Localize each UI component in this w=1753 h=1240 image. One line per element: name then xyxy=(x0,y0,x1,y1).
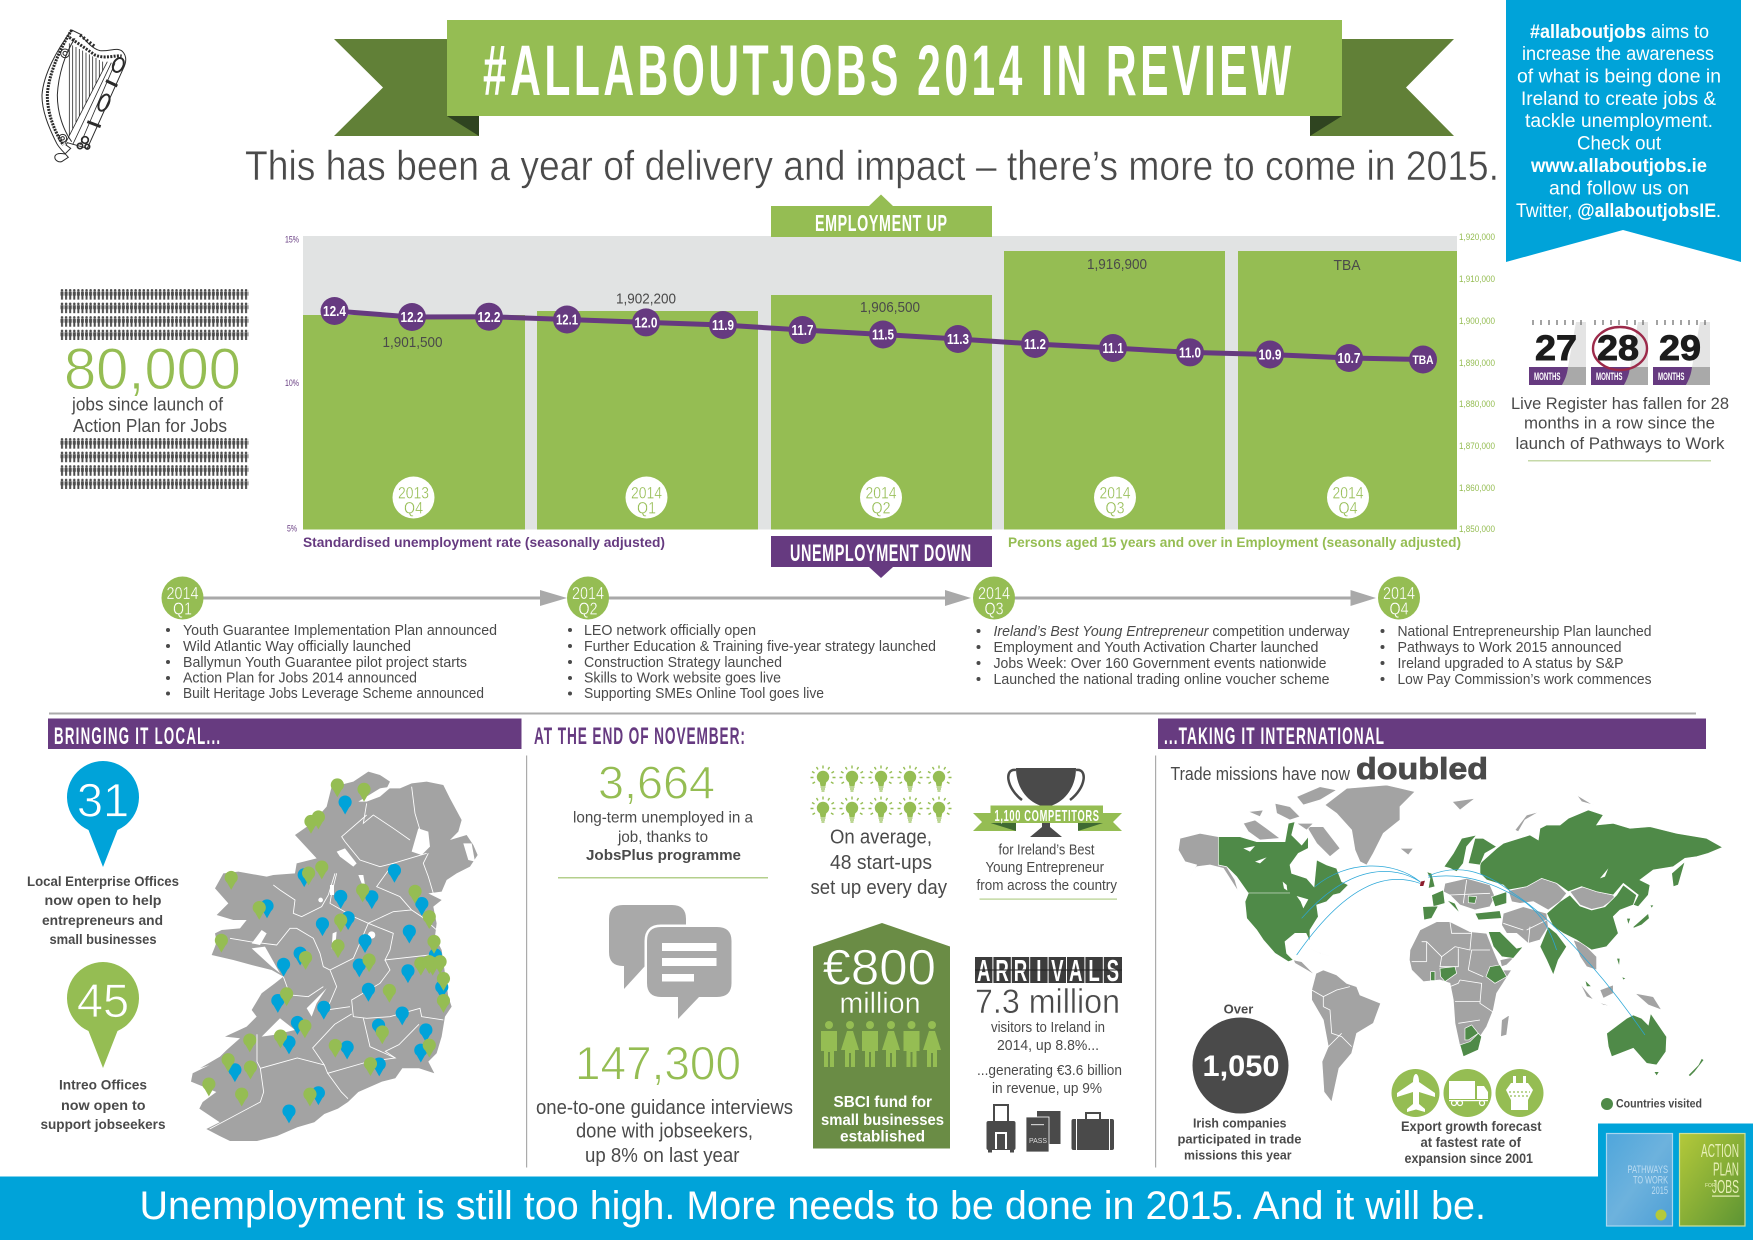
heading: taking it international: ...TAKING IT INTERNATIONAL xyxy=(1164,723,1384,750)
icon: speech bubbles xyxy=(609,905,732,1019)
callout: about the campaign: Ireland to create jobs & xyxy=(1521,89,1716,110)
stat: 3,664 long-term unemployed xyxy=(558,756,768,878)
panel: SBCI fund xyxy=(813,923,950,1148)
chart captions: Persons aged 15 years and over in Employment (seasonally adjusted) xyxy=(1008,534,1461,550)
stat: 147,300 interviews: done with jobseekers, xyxy=(576,1120,753,1142)
calendar 28 xyxy=(1591,320,1648,385)
callout: about the campaign: #allaboutjobs aims to xyxy=(1530,22,1709,43)
timeline: 2014 Q3: 2014 xyxy=(978,583,1010,603)
text: local enterprise offices: Local Enterprise Offices xyxy=(27,873,179,889)
text: local enterprise offices: small businesses xyxy=(50,931,157,947)
icon: luggage xyxy=(986,1105,1114,1152)
stat: 147,300 interviews: 147,300 xyxy=(575,1036,741,1090)
map: world with countries visited xyxy=(1178,785,1723,1102)
text: local enterprise offices: now open to help xyxy=(44,892,162,908)
stat: 80,000 jobs: 80,000 xyxy=(64,337,241,402)
pin: 31 local enterprise offices: 31 xyxy=(77,774,129,826)
chart: unemployment rate and employment xyxy=(285,232,1495,550)
stat: 147,300 interviews: one-to-one guidance interviews xyxy=(536,1097,793,1119)
callout: about the campaign: Check out xyxy=(1577,134,1662,154)
text: local enterprise offices xyxy=(27,873,179,947)
panel: at the end of November xyxy=(534,723,1122,1167)
timeline: 2014 Q1: Ballymun Youth Guarantee pilot project starts xyxy=(183,655,467,671)
timeline: 2014 Q2: 2014 xyxy=(572,583,604,603)
icon: trophy with ribbon: 1,100 COMPETITORS xyxy=(994,806,1099,825)
callout: about the campaign: Twitter, @allaboutjobsIE. xyxy=(1516,201,1721,222)
timeline: 2014 Q1: Youth Guarantee Implementation Plan announced xyxy=(183,623,497,639)
stat: 147,300 interviews: up 8% on last year xyxy=(585,1145,740,1167)
stat: 7.3 million visitors: ...generating €3.6 billion xyxy=(977,1062,1122,1079)
left axis: 15% xyxy=(285,234,299,244)
stat: 7.3 million visitors: visitors to Ireland in xyxy=(991,1019,1105,1036)
bar: 2014 Q4 xyxy=(1238,251,1457,530)
text: intreo offices: support jobseekers xyxy=(40,1116,166,1132)
timeline: 2014 Q2: Skills to Work website goes live xyxy=(584,670,781,686)
right axis: 1,900,000 xyxy=(1459,316,1495,326)
left axis: 10% xyxy=(285,378,299,388)
calendar 27: 27 xyxy=(1535,329,1577,368)
bar: 2014 Q1: Q1 xyxy=(637,498,656,518)
unemployment line: 12.2 xyxy=(400,309,424,326)
text: young entrepreneur competitors: from across the country xyxy=(976,878,1118,894)
stat: 1,050 Irish companies: Irish companies xyxy=(1193,1116,1286,1130)
timeline: 2014 Q4: Ireland upgraded to A status by S&P xyxy=(1398,656,1624,672)
text: export growth forecast: at fastest rate of xyxy=(1420,1135,1521,1150)
stat: 3,664 long-term unemployed: JobsPlus programme xyxy=(586,847,741,864)
stat: 80,000 jobs: Action Plan for Jobs xyxy=(73,416,227,436)
icon: arrivals board: ARRIVALS xyxy=(977,954,1119,988)
title banner: #ALLABOUTJOBS 2014 IN REVIEW xyxy=(483,32,1292,111)
text: trade missions doubled: doubled xyxy=(1356,751,1488,786)
subtitle: This has been a year of delivery and impact – there’s more to come in 2015. xyxy=(245,142,1499,189)
icon: truck xyxy=(1444,1069,1492,1117)
panel: SBCI fund: €800 xyxy=(822,940,936,996)
bar: 2014 Q1 xyxy=(537,311,758,530)
stat: live register calendars: launch of Pathways to Work xyxy=(1516,434,1725,453)
footer banner: Unemployment is still too high. More needs to be done in 2015. And it will be. xyxy=(140,1184,1486,1228)
report cover: Action Plan for Jobs: FOR xyxy=(1705,1183,1716,1189)
stat: 48 start-ups: On average, xyxy=(830,826,932,848)
label: employment up xyxy=(771,194,992,237)
bar: 2014 Q2: Q2 xyxy=(872,498,890,518)
calendar 29: MONTHS xyxy=(1658,371,1684,383)
unemployment line: 12.4 xyxy=(323,303,347,320)
text: trade missions doubled xyxy=(1170,751,1488,786)
timeline: 2014 Q3: Launched the national trading online voucher scheme xyxy=(994,672,1330,688)
timeline: 2014 Q4: Q4 xyxy=(1390,598,1409,618)
unemployment line: 11.9 xyxy=(712,317,734,334)
stat: 7.3 million visitors: 7.3 million xyxy=(975,983,1120,1021)
timeline: 2014 Q3: Q3 xyxy=(984,598,1004,618)
icon: luggage: PASS xyxy=(1029,1136,1047,1145)
timeline: 2014 Q4: National Entrepreneurship Plan launched xyxy=(1398,624,1652,640)
Eastern hemisphere xyxy=(1409,795,1723,1077)
right axis: 1,860,000 xyxy=(1459,483,1495,493)
stat: 1,050 Irish companies: Over xyxy=(1224,1002,1253,1016)
label: unemployment down: UNEMPLOYMENT DOWN xyxy=(790,540,971,567)
callout: about the campaign: tackle unemployment. xyxy=(1525,111,1713,132)
bar: 2013 Q4 xyxy=(303,315,525,530)
timeline: 2014 Q2: Further Education & Training five-year strategy launched xyxy=(584,639,936,655)
bar: 2014 Q1: 2014 xyxy=(631,484,662,502)
bar: 2014 Q2: 2014 xyxy=(866,484,896,502)
stat: live register calendars: months in a row since the xyxy=(1524,414,1715,432)
report cover: Pathways to Work 2015 xyxy=(1606,1134,1672,1226)
timeline: 2014 Q1: 2014 xyxy=(166,583,199,603)
stat: 3,664 long-term unemployed: long-term unemployed in a xyxy=(573,810,753,826)
stat: live register calendars: Live Register has fallen for 28 xyxy=(1511,394,1729,413)
timeline arrows xyxy=(200,590,1376,606)
heading: bringing it local: BRINGING IT LOCAL... xyxy=(54,723,220,750)
panel: SBCI fund: million xyxy=(840,987,920,1020)
text: intreo offices: now open to xyxy=(61,1097,146,1113)
unemployment line: 11.3 xyxy=(947,331,969,348)
icon: trophy with ribbon xyxy=(973,768,1122,837)
report cover: Action Plan for Jobs xyxy=(1680,1134,1745,1226)
stat: 48 start-ups: set up every day xyxy=(810,877,947,899)
text: trade missions doubled: Trade missions have now xyxy=(1170,764,1351,784)
panel: SBCI fund: small businesses xyxy=(821,1112,944,1129)
icon: people xyxy=(821,1021,941,1067)
report cover: Pathways to Work 2015: PATHWAYS xyxy=(1628,1164,1668,1176)
calendar 29 xyxy=(1653,320,1710,385)
report cover: Pathways to Work 2015: 2015 xyxy=(1652,1185,1668,1197)
stat: 3,664 long-term unemployed: job, thanks to xyxy=(617,829,708,846)
bar: 2014 Q3: Q3 xyxy=(1106,498,1124,518)
heading: taking it international xyxy=(1158,718,1706,750)
employment values: 1,906,500 xyxy=(860,299,920,316)
bar: 2014 Q3: 2014 xyxy=(1100,484,1130,502)
stat: 80,000 jobs: jobs since launch of xyxy=(71,394,224,414)
unemployment line: 11.2 xyxy=(1024,336,1046,353)
unemployment line: 11.1 xyxy=(1102,340,1124,357)
unemployment line: 11.5 xyxy=(872,326,894,344)
bar: 2014 Q4: Q4 xyxy=(1338,498,1358,518)
stat: 7.3 million visitors xyxy=(975,983,1122,1097)
unemployment line: 12.2 xyxy=(478,309,500,326)
timeline xyxy=(162,576,1652,702)
callout: about the campaign xyxy=(1506,0,1741,262)
callout: about the campaign: increase the awareness xyxy=(1522,44,1714,65)
text: export growth forecast: Export growth forecast xyxy=(1401,1119,1542,1134)
stat: 147,300 interviews xyxy=(536,1036,793,1167)
chart captions xyxy=(303,534,1461,550)
stat: 3,664 long-term unemployed: 3,664 xyxy=(598,756,715,808)
timeline: 2014 Q1: Q1 xyxy=(173,598,192,618)
calendar 28: MONTHS xyxy=(1596,371,1622,383)
text: export growth forecast xyxy=(1401,1119,1542,1166)
icon: ship xyxy=(1496,1069,1544,1117)
left axis xyxy=(285,234,299,534)
icon: plane xyxy=(1392,1069,1440,1117)
stat: 7.3 million visitors: in revenue, up 9% xyxy=(992,1080,1102,1097)
bar: 2013 Q4: Q4 xyxy=(404,498,423,518)
label: unemployment down xyxy=(771,536,992,578)
right axis: 1,850,000 xyxy=(1459,524,1495,534)
pin: 45 intreo offices: 45 xyxy=(77,974,129,1027)
right axis: 1,910,000 xyxy=(1459,274,1495,284)
report cover: Pathways to Work 2015: TO WORK xyxy=(1633,1174,1668,1186)
timeline: 2014 Q2: Supporting SMEs Online Tool goes live xyxy=(584,686,824,702)
timeline: 2014 Q2: LEO network officially open xyxy=(584,623,756,639)
employment values: 1,916,900 xyxy=(1087,256,1147,273)
timeline: 2014 Q2: Construction Strategy launched xyxy=(584,655,782,671)
heading: bringing it local xyxy=(48,718,522,750)
callout: about the campaign: of what is being done in xyxy=(1517,66,1721,88)
legend: countries visited: Countries visited xyxy=(1616,1096,1702,1110)
text: young entrepreneur competitors xyxy=(976,842,1118,900)
stat: 1,050 Irish companies: 1,050 xyxy=(1202,1050,1280,1083)
timeline: 2014 Q4: Low Pay Commission’s work commences xyxy=(1398,672,1652,688)
footer banner xyxy=(0,1124,1753,1240)
timeline: 2014 Q2: Q2 xyxy=(578,598,598,618)
timeline: 2014 Q3: Jobs Week: Over 160 Government events nationwide xyxy=(994,656,1326,672)
text: intreo offices: Intreo Offices xyxy=(59,1076,147,1092)
icon: Irish harp emblem xyxy=(42,30,126,162)
calendar 29: 29 xyxy=(1659,329,1701,368)
timeline: 2014 Q4: 2014 xyxy=(1383,583,1415,603)
calendar 27 xyxy=(1529,320,1586,385)
chart captions: Standardised unemployment rate (seasonally adjusted) xyxy=(303,534,665,550)
unemployment line: 11.0 xyxy=(1179,344,1201,362)
unemployment line: 11.7 xyxy=(792,322,814,339)
timeline: 2014 Q3: Employment and Youth Activation Charter launched xyxy=(994,640,1318,656)
stat: live register calendars xyxy=(1511,320,1729,462)
timeline: 2014 Q1: Wild Atlantic Way officially launched xyxy=(183,639,411,655)
timeline: 2014 Q4 xyxy=(1378,576,1652,688)
timeline: 2014 Q4: Pathways to Work 2015 announced xyxy=(1398,640,1622,656)
text: young entrepreneur competitors: for Ireland’s Best xyxy=(998,842,1094,858)
timeline: 2014 Q1 xyxy=(162,576,497,702)
timeline: 2014 Q1: Built Heritage Jobs Leverage Scheme announced xyxy=(183,686,484,702)
right axis: 1,870,000 xyxy=(1459,441,1495,451)
pin: 31 local enterprise offices xyxy=(67,761,139,867)
unemployment line: TBA xyxy=(1412,353,1434,367)
stat: 1,050 Irish companies: missions this year xyxy=(1184,1148,1292,1162)
right axis: 1,920,000 xyxy=(1459,232,1495,242)
panel: SBCI fund: SBCI fund for xyxy=(834,1094,932,1111)
unemployment line: 10.9 xyxy=(1258,346,1282,364)
timeline: 2014 Q1: Action Plan for Jobs 2014 announced xyxy=(183,670,417,686)
unemployment line xyxy=(320,297,1437,374)
unemployment line: 10.7 xyxy=(1338,350,1360,367)
stat: 48 start-ups xyxy=(810,826,947,899)
timeline: 2014 Q2 xyxy=(567,576,936,702)
right axis: 1,890,000 xyxy=(1459,358,1495,368)
title banner xyxy=(334,20,1454,136)
timeline: 2014 Q3 xyxy=(973,576,1350,688)
panel: taking it international xyxy=(1158,718,1723,1166)
text: young entrepreneur competitors: Young Entrepreneur xyxy=(986,860,1104,876)
stat: 48 start-ups: 48 start-ups xyxy=(830,852,932,874)
bar: 2013 Q4: 2013 xyxy=(398,484,429,502)
left axis: 5% xyxy=(287,524,297,534)
text: local enterprise offices: entrepreneurs and xyxy=(42,912,163,928)
text: intreo offices xyxy=(40,1076,166,1132)
bar: 2014 Q3 xyxy=(1004,251,1225,530)
unemployment line: 12.0 xyxy=(634,314,658,332)
stat: 1,050 Irish companies: participated in trade xyxy=(1178,1132,1302,1146)
employment values: TBA xyxy=(1334,257,1360,274)
unemployment line: 12.1 xyxy=(556,312,578,328)
pin: 45 intreo offices xyxy=(67,962,139,1068)
bar: 2014 Q2 xyxy=(771,295,992,530)
calendar 27: MONTHS xyxy=(1534,371,1560,383)
stat: 80,000 jobs xyxy=(60,289,249,489)
stat: 7.3 million visitors: 2014, up 8.8%... xyxy=(997,1037,1099,1054)
label: employment up: EMPLOYMENT UP xyxy=(815,212,947,237)
stat: 1,050 Irish companies xyxy=(1178,1002,1302,1162)
heading: at the end of November: AT THE END OF NOVEMBER: xyxy=(534,723,745,750)
calendar 28: 28 xyxy=(1597,329,1639,368)
map: Ireland with office pins xyxy=(191,772,478,1141)
callout: about the campaign: www.allaboutjobs.ie xyxy=(1530,156,1707,177)
icon: light bulbs xyxy=(810,766,952,822)
bar: 2014 Q4: 2014 xyxy=(1332,484,1364,502)
right axis: 1,880,000 xyxy=(1459,399,1495,409)
right axis xyxy=(1459,232,1495,534)
panel: bringing it local xyxy=(27,718,522,1141)
employment values: 1,901,500 xyxy=(382,334,442,351)
employment values: 1,902,200 xyxy=(616,290,676,308)
callout: about the campaign: and follow us on xyxy=(1549,178,1689,200)
employment values xyxy=(382,256,1360,351)
panel: SBCI fund: established xyxy=(840,1128,925,1146)
text: export growth forecast: expansion since 2001 xyxy=(1404,1151,1533,1166)
timeline: 2014 Q3: Ireland’s Best Young Entrepreneur competition underway xyxy=(994,624,1350,640)
